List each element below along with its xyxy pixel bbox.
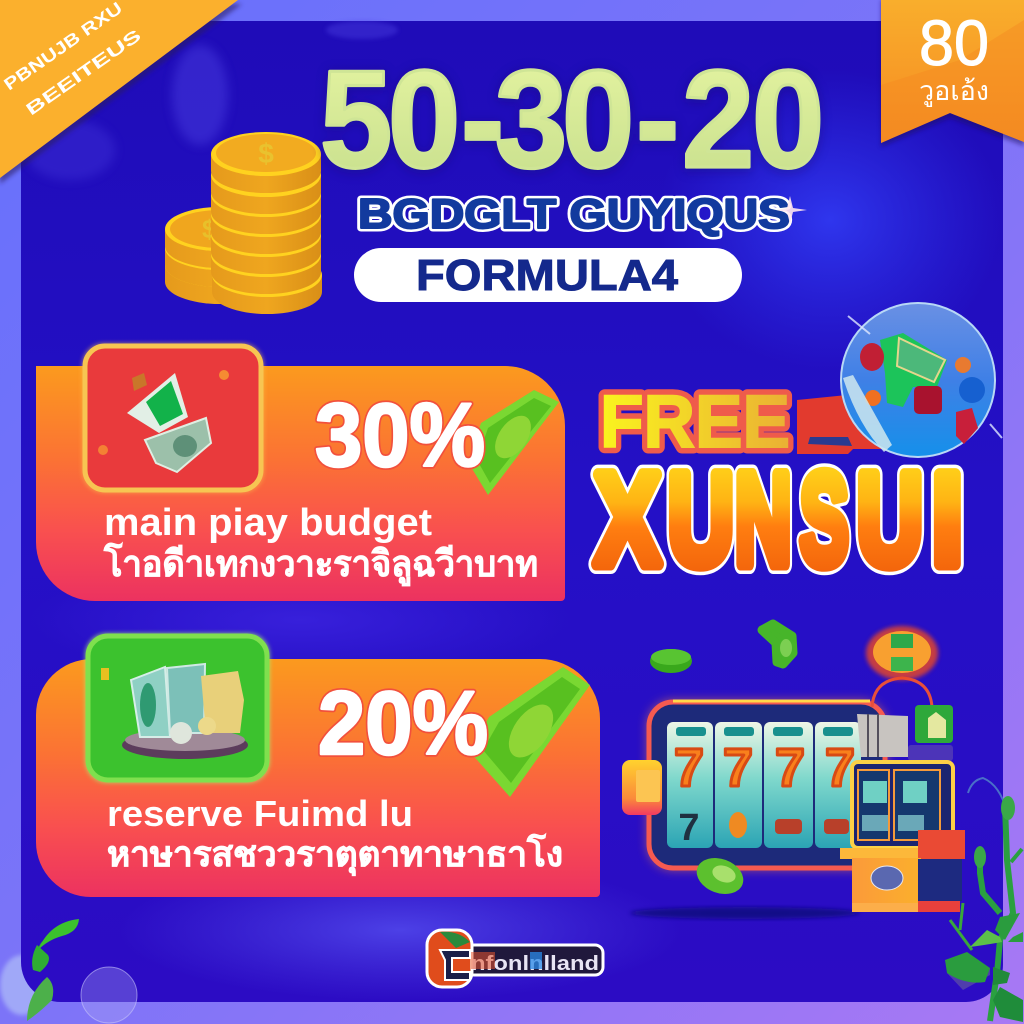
word XUNSUI: I: [932, 447, 963, 592]
corner ribbon left: [0, 0, 242, 184]
large stack: $: [258, 138, 274, 169]
reels: 7: [775, 738, 805, 798]
brand logo: [427, 930, 603, 987]
badge caption: วูอเอ้ง: [919, 76, 989, 107]
word XUNSUI: U: [668, 446, 734, 592]
ribbon text: BEEITEUS: [22, 26, 145, 119]
word XUNSUI: S: [800, 448, 849, 592]
percentage: 30%: [315, 386, 485, 486]
globe: [841, 303, 1002, 457]
word XUNSUI: [595, 446, 963, 592]
percentage: 30%: [315, 386, 485, 486]
word XUNSUI: I: [932, 447, 963, 592]
panel: 20% reserve fund: [36, 633, 600, 897]
free xunsui logo: [595, 303, 1002, 592]
word XUNSUI: U: [857, 446, 923, 592]
word XUNSUI: U: [668, 446, 734, 592]
word FREE: FREE: [600, 380, 790, 463]
ribbon text: PBNUJB RXU: [0, 0, 126, 94]
frame highlight bottom left: [0, 955, 44, 1015]
green banknote: [470, 667, 590, 797]
coin slot: [871, 866, 903, 890]
icon: coin stacks: [165, 132, 322, 314]
label english: main piay budget: [104, 502, 432, 544]
percentage: 20%: [318, 674, 488, 774]
pill label: FORMULA4: [416, 251, 679, 300]
label thai: โาอดีาเทกงวาะราจิลูฉวีาบาท: [103, 542, 538, 587]
label thai: หาษารสชววราตุตาทาษาธาโง: [107, 833, 563, 876]
plant left with bubble: [27, 919, 137, 1023]
reels: 7: [674, 738, 704, 798]
word XUNSUI: X: [595, 447, 660, 592]
icon tile: safe with gold: [85, 633, 270, 783]
large stack: [211, 132, 322, 314]
reels: 7: [678, 807, 700, 849]
formula pill: [354, 248, 742, 302]
corner badge right: [881, 0, 1024, 147]
lever housing: [622, 760, 662, 815]
bubble: [81, 967, 137, 1023]
word FREE: FREE: [600, 380, 790, 463]
word XUNSUI: N: [735, 446, 791, 592]
brand logo: nfonlnlland: [471, 953, 599, 975]
boxes on top: [857, 705, 953, 761]
slot machine illustration: [622, 624, 965, 919]
reels: [667, 722, 861, 849]
cabinet: [840, 762, 965, 912]
subtitle: BGDGLT GUYIQUS: [358, 190, 790, 237]
word XUNSUI: X: [595, 447, 660, 592]
card background: [36, 366, 565, 601]
top light: [866, 626, 938, 707]
small stack: [165, 207, 275, 304]
reels: 7: [825, 738, 855, 798]
ground shadow: [630, 907, 860, 919]
label english: reserve Fuimd lu: [107, 793, 413, 834]
machine frame: [647, 700, 887, 870]
small stack: $: [202, 214, 217, 244]
subtitle: BGDGLT GUYIQUS: [358, 190, 790, 237]
card background: [36, 659, 600, 897]
plant right: [945, 778, 1023, 1022]
reels: 7: [723, 738, 753, 798]
floating green coins: [650, 624, 793, 900]
ribbon: [797, 395, 892, 454]
panel: 30% main play budget: [36, 343, 565, 601]
title 50-30-20: 50-30-20: [320, 43, 824, 199]
ribbon text: [0, 0, 145, 119]
badge number: 80: [919, 7, 989, 79]
green banknote: [468, 390, 559, 495]
word XUNSUI: U: [857, 446, 923, 592]
percentage: 20%: [318, 674, 488, 774]
word XUNSUI: N: [735, 446, 791, 592]
word XUNSUI: S: [800, 448, 849, 592]
icon tile: money: [82, 343, 264, 493]
title 50-30-20: 50-30-20: [320, 41, 824, 197]
